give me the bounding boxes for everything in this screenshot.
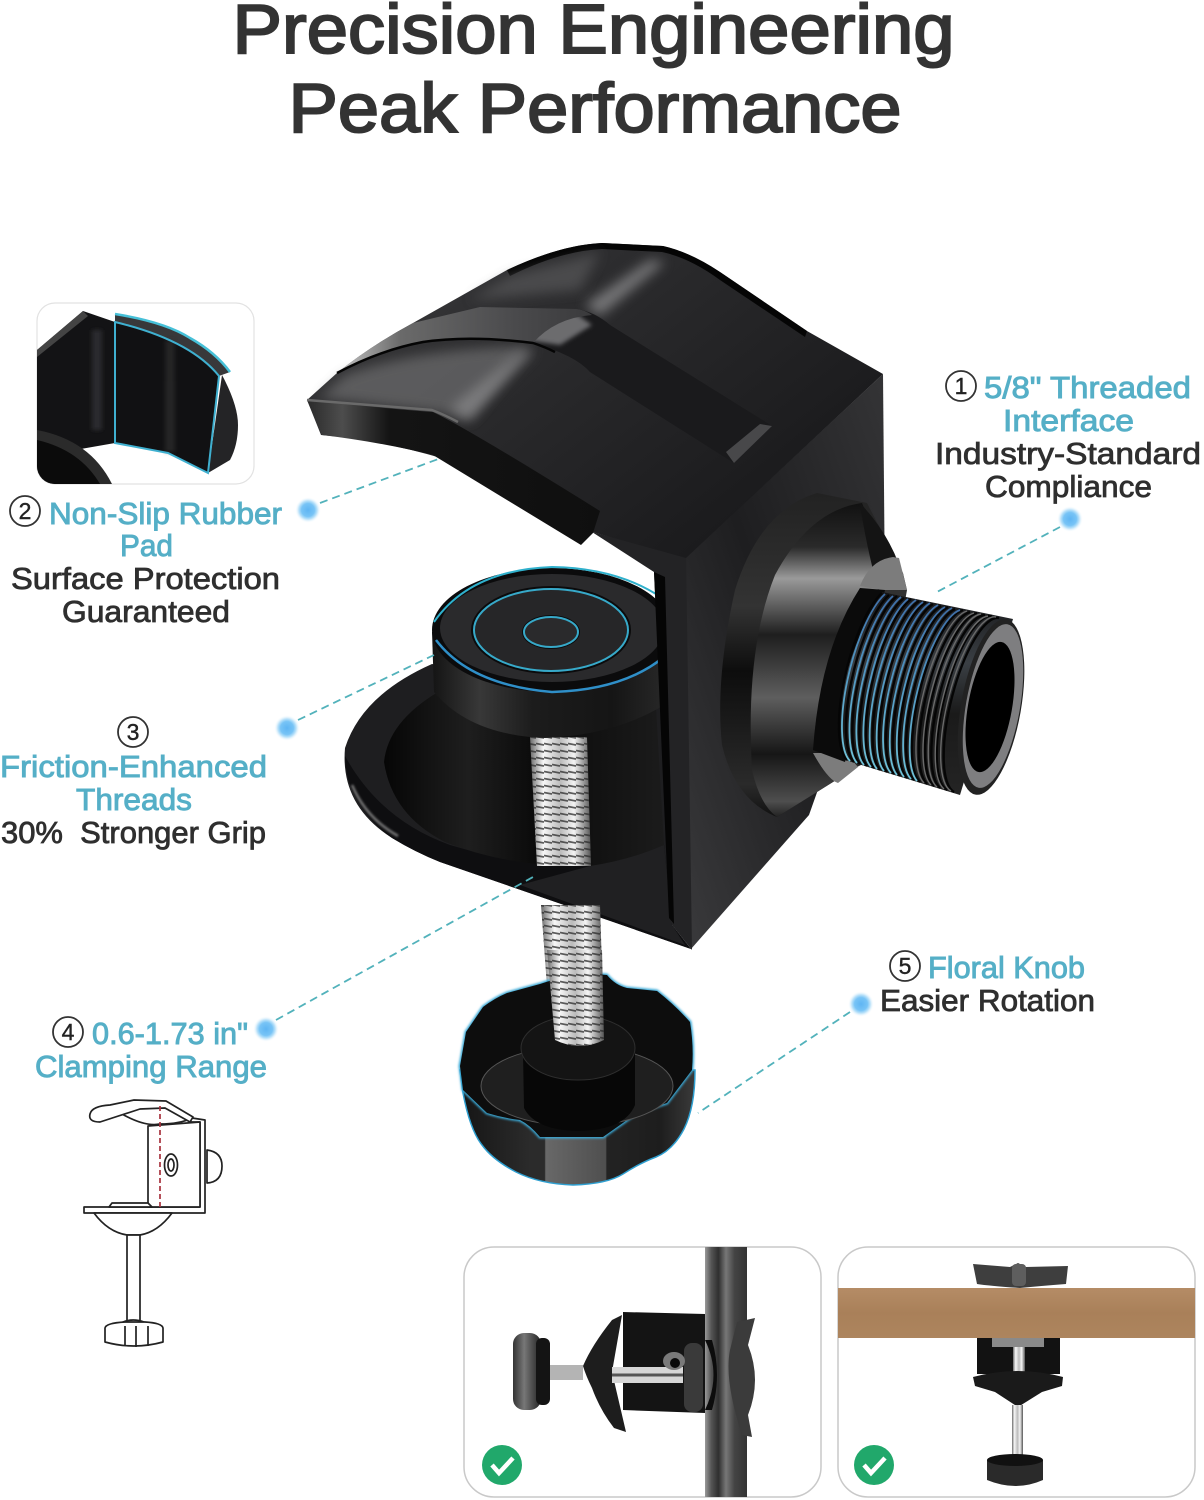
- number badge 2: [10, 496, 40, 526]
- knob side view: [513, 1333, 550, 1410]
- leader line: rubber pad: [320, 458, 441, 503]
- callout: clamping range: [35, 1016, 267, 1084]
- number badge 3: [118, 717, 148, 747]
- callout: 5/8 threaded interface: 5/8" Threaded: [984, 370, 1191, 405]
- silver disc: [992, 1338, 1044, 1347]
- lip of top plate: [307, 400, 600, 545]
- panel: clamp mounted on pole: [464, 1247, 821, 1497]
- callout: 5/8 threaded interface: [935, 370, 1201, 504]
- clamp body: [977, 1338, 1060, 1374]
- clamp cone: [583, 1315, 626, 1432]
- check badge: [854, 1445, 894, 1485]
- callout dot 3: [274, 715, 300, 741]
- callout: non-slip rubber pad: Guaranteed: [62, 594, 230, 629]
- number badge 5: 5: [899, 953, 911, 979]
- lower screw: [541, 905, 603, 1000]
- callout: clamping range: Clamping Range: [35, 1049, 267, 1084]
- check badge: [482, 1445, 522, 1485]
- panel: clamp mounted on desk: [838, 1247, 1195, 1497]
- main product: clamp: [307, 243, 1036, 1000]
- callout: non-slip rubber pad: Non-Slip Rubber: [49, 496, 282, 531]
- callout: floral knob: Easier Rotation: [880, 983, 1095, 1018]
- number badge 5: [890, 951, 920, 981]
- mounting hole: [663, 1352, 685, 1370]
- callout: floral knob: Floral Knob: [928, 950, 1085, 985]
- upper screw: [1013, 1347, 1025, 1372]
- clamp top: [973, 1263, 1068, 1288]
- callout: non-slip rubber pad: Surface Protection: [11, 561, 280, 596]
- line drawing: clamping range diagram: [84, 1100, 222, 1347]
- callout: friction-enhanced threads: Threads: [76, 782, 192, 817]
- callout: friction-enhanced threads: 30% Stronger Grip: [1, 815, 266, 850]
- threaded barrel with highlighted threads: [839, 592, 1036, 800]
- callout: friction-enhanced threads: [0, 717, 267, 850]
- title: [232, 0, 954, 147]
- threaded collar flange: [720, 493, 907, 817]
- rib on top plate: [533, 309, 772, 463]
- clamp side face: [685, 374, 885, 949]
- callout dot 5: [848, 991, 874, 1017]
- wood desk: [838, 1288, 1195, 1338]
- callout dot 4: [253, 1016, 279, 1042]
- callout: floral knob: [880, 950, 1095, 1018]
- threaded rod left: [550, 1365, 583, 1380]
- callout: non-slip rubber pad: [10, 496, 282, 629]
- inset panel: rubber pad detail: [37, 303, 254, 484]
- wing on top plate: [337, 307, 592, 373]
- knob inner floor: [481, 1046, 673, 1126]
- clamp body: [623, 1312, 705, 1413]
- leader line: clamping range: [276, 877, 533, 1020]
- callout: non-slip rubber pad: Pad: [120, 528, 173, 563]
- threaded rod: [612, 1367, 683, 1383]
- clamp front strip: [592, 532, 692, 950]
- number badge 4: [53, 1017, 83, 1047]
- collar ledge: [813, 557, 907, 783]
- number badge 1: 1: [955, 373, 967, 399]
- rear pressure plate: [728, 1318, 755, 1437]
- leader line: threads: [298, 655, 434, 720]
- clamp dish: [384, 690, 664, 866]
- callout: 5/8 threaded interface: Interface: [1003, 403, 1134, 438]
- number badge 4: 4: [62, 1019, 75, 1045]
- callout dot 1: [1057, 506, 1083, 532]
- knob screw end: [547, 950, 604, 1046]
- knob rim: [460, 974, 693, 1137]
- lower plate: [973, 1371, 1063, 1407]
- callout: clamping range: 0.6-1.73 in": [92, 1016, 248, 1051]
- knob side wall: [460, 1070, 695, 1185]
- knob: [987, 1454, 1043, 1486]
- lower screw: [1012, 1405, 1023, 1457]
- callout: 5/8 threaded interface: Industry-Standard: [935, 436, 1201, 471]
- knob rim glow: [460, 974, 693, 1137]
- clamp bottom plate: [345, 664, 691, 949]
- pressure disc with highlighted rings: [432, 567, 672, 738]
- title: Peak Performance: [288, 69, 902, 147]
- callout: 5/8 threaded interface: Compliance: [985, 469, 1152, 504]
- number badge 1: [946, 371, 976, 401]
- upper screw: [530, 737, 591, 866]
- pole: [705, 1247, 747, 1497]
- callout dot 2: [295, 497, 321, 523]
- floral knob: [460, 950, 695, 1185]
- knob hub: [521, 1016, 635, 1131]
- number badge 2: 2: [19, 498, 31, 524]
- clamp top plate with rubber pad: [307, 243, 883, 558]
- leader line: threaded interface: [935, 527, 1060, 593]
- leader line: floral knob: [698, 1012, 850, 1113]
- mount shadow on pole: [705, 1340, 717, 1410]
- number badge 3: 3: [127, 719, 139, 745]
- clamp pad: [684, 1343, 703, 1412]
- callout: friction-enhanced threads: Friction-Enhanced: [0, 749, 267, 784]
